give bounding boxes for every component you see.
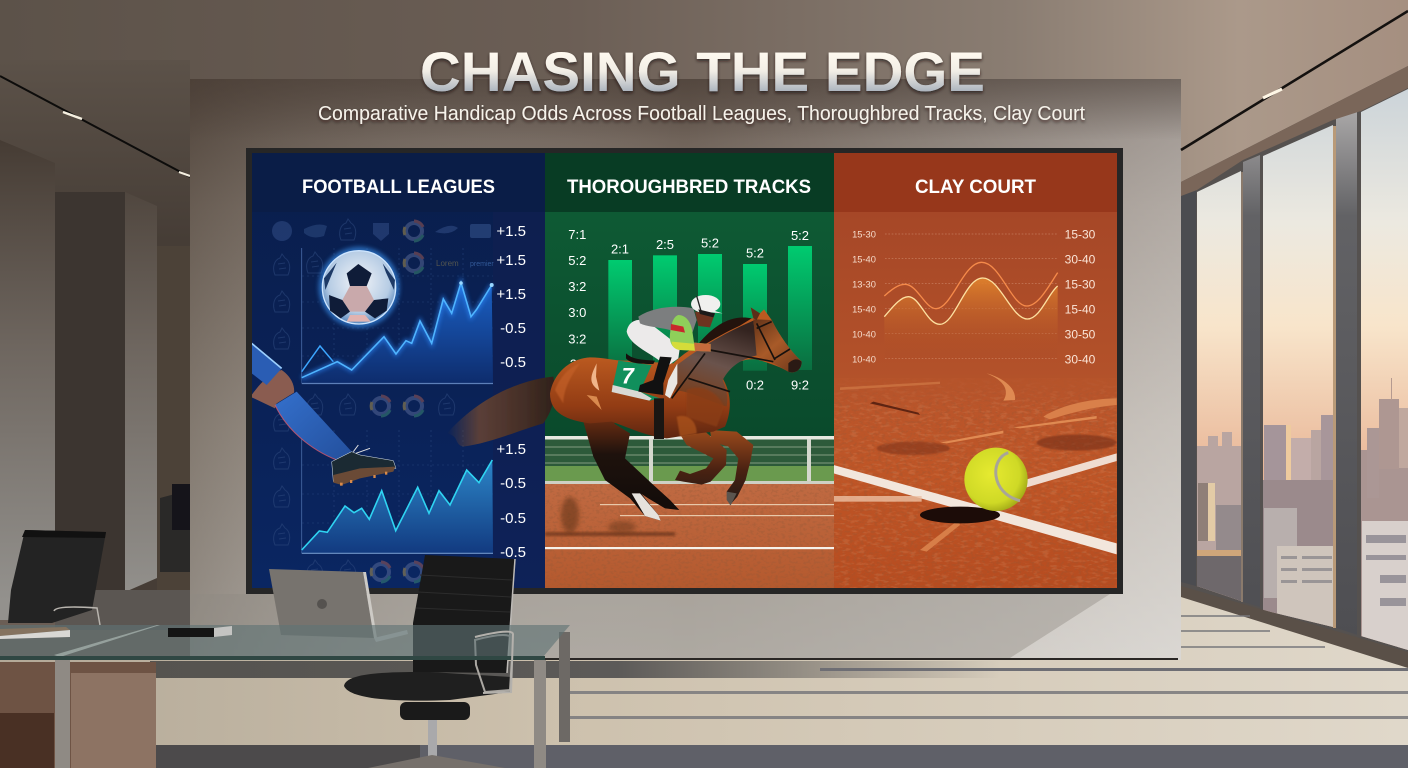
clay odds line chart: 15-40 — [1065, 302, 1096, 316]
bar chart: 0:2 — [746, 377, 764, 392]
desk cabinet — [0, 662, 156, 768]
mullions — [1181, 190, 1196, 586]
panel: football leagues — [252, 153, 545, 588]
foreground towers — [1198, 483, 1208, 541]
clay odds line chart: 15-30 — [1065, 277, 1096, 291]
odds labels: football: +1.5 — [496, 441, 526, 458]
horse tail — [447, 377, 555, 447]
laptop — [269, 569, 408, 642]
bar chart — [568, 227, 812, 392]
bar chart: 2:1 — [611, 241, 629, 256]
title: CHASING THE EDGE — [420, 40, 985, 103]
horse neck and mane — [672, 321, 758, 407]
league logo watermarks: premier — [470, 261, 494, 268]
bar chart: 5:2 — [746, 246, 764, 261]
league logo watermarks: Lorem — [436, 259, 459, 268]
bar chart: 7:1 — [568, 227, 586, 242]
clay odds line chart: 10-40 — [852, 354, 876, 364]
upper line chart — [302, 248, 494, 384]
bar chart: 3:0 — [568, 305, 586, 320]
saddle cloth with number: 7 — [622, 363, 636, 388]
bar chart: 9:2 — [791, 377, 809, 392]
heading: clay court: CLAY COURT — [915, 177, 1036, 198]
subtitle: Comparative Handicap Odds Across Football Leagues, Thoroughbred Tracks, Clay Court — [318, 103, 1085, 125]
thoroughbred horse and jockey illustration — [447, 295, 802, 521]
heading band: football — [252, 153, 545, 212]
odds labels: football: +1.5 — [496, 223, 526, 240]
bar chart: 3:2 — [568, 332, 586, 347]
bar chart: 2:5 — [656, 237, 674, 252]
panel: clay court — [833, 153, 1117, 588]
clay odds line chart: 15-30 — [1065, 227, 1096, 241]
clay odds line chart: 15-40 — [852, 254, 876, 264]
heading band: clay — [834, 153, 1117, 212]
office ceiling — [0, 0, 1408, 200]
office chair front — [344, 555, 515, 768]
windows with city skyline — [1181, 66, 1408, 670]
odds labels: football: -0.5 — [500, 544, 526, 561]
lower line chart — [302, 430, 493, 553]
floor — [0, 597, 1408, 768]
odds labels: football: -0.5 — [500, 354, 526, 371]
clay odds line chart: 15-40 — [852, 305, 876, 315]
panel: thoroughbred tracks — [545, 153, 834, 588]
clay odds line chart: 10-40 — [852, 329, 876, 339]
glass top — [0, 625, 570, 657]
fence and infield — [545, 436, 834, 484]
bar chart: 2 — [570, 356, 577, 371]
dirt race track — [545, 484, 834, 588]
odds labels: football: +1.5 — [496, 286, 526, 303]
league logo watermarks — [272, 219, 494, 582]
odds labels: football: -0.5 — [500, 475, 526, 492]
clay odds line chart: 30-40 — [1065, 252, 1096, 266]
bar chart: 5:2 — [568, 253, 586, 268]
heading: football leagues: FOOTBALL LEAGUES — [302, 177, 495, 198]
odds labels: football: -0.5 — [500, 510, 526, 527]
clay odds line chart — [852, 227, 1096, 366]
left office alcove with columns — [0, 60, 190, 630]
icon: tennis ball — [920, 448, 1028, 523]
bridle and reins — [672, 322, 790, 398]
clay odds line chart: 13-30 — [852, 279, 876, 289]
bar chart: 5:2 — [701, 236, 719, 251]
desk legs — [55, 660, 70, 768]
horse body — [550, 307, 802, 438]
bar chart: 3:2 — [568, 279, 586, 294]
distant skyline — [1197, 378, 1408, 650]
glass desk — [0, 569, 570, 768]
upper frame beam — [1181, 66, 1408, 196]
bar chart: 5:2 — [791, 228, 809, 243]
sill — [1181, 586, 1408, 668]
horse legs — [580, 410, 753, 521]
clay odds line chart: 15-30 — [852, 229, 876, 239]
clay odds line chart: 30-40 — [1065, 352, 1096, 366]
wall-mounted display frame — [246, 148, 1123, 594]
ceiling light track left — [0, 76, 190, 177]
heading band: thoroughbred — [545, 153, 834, 212]
odds labels: football: +1.5 — [496, 252, 526, 269]
heading: thoroughbred tracks: THOROUGHBRED TRACKS — [567, 177, 811, 198]
right ceiling light track — [1181, 11, 1408, 150]
clay odds line chart: 30-50 — [1065, 327, 1096, 341]
jockey — [627, 295, 723, 398]
background chair behind desk — [8, 484, 190, 625]
icon: soccer ball — [318, 247, 400, 328]
odds labels: football: -0.5 — [500, 320, 526, 337]
court scuffs — [840, 373, 1117, 552]
odds labels: football — [496, 223, 526, 561]
back wall — [190, 79, 1181, 661]
court lines — [833, 453, 1117, 554]
clay court surface texture — [834, 375, 1117, 588]
saddle cloth with number — [612, 353, 664, 439]
icon: kicking leg with boot — [252, 343, 396, 486]
books on desk — [0, 626, 232, 639]
